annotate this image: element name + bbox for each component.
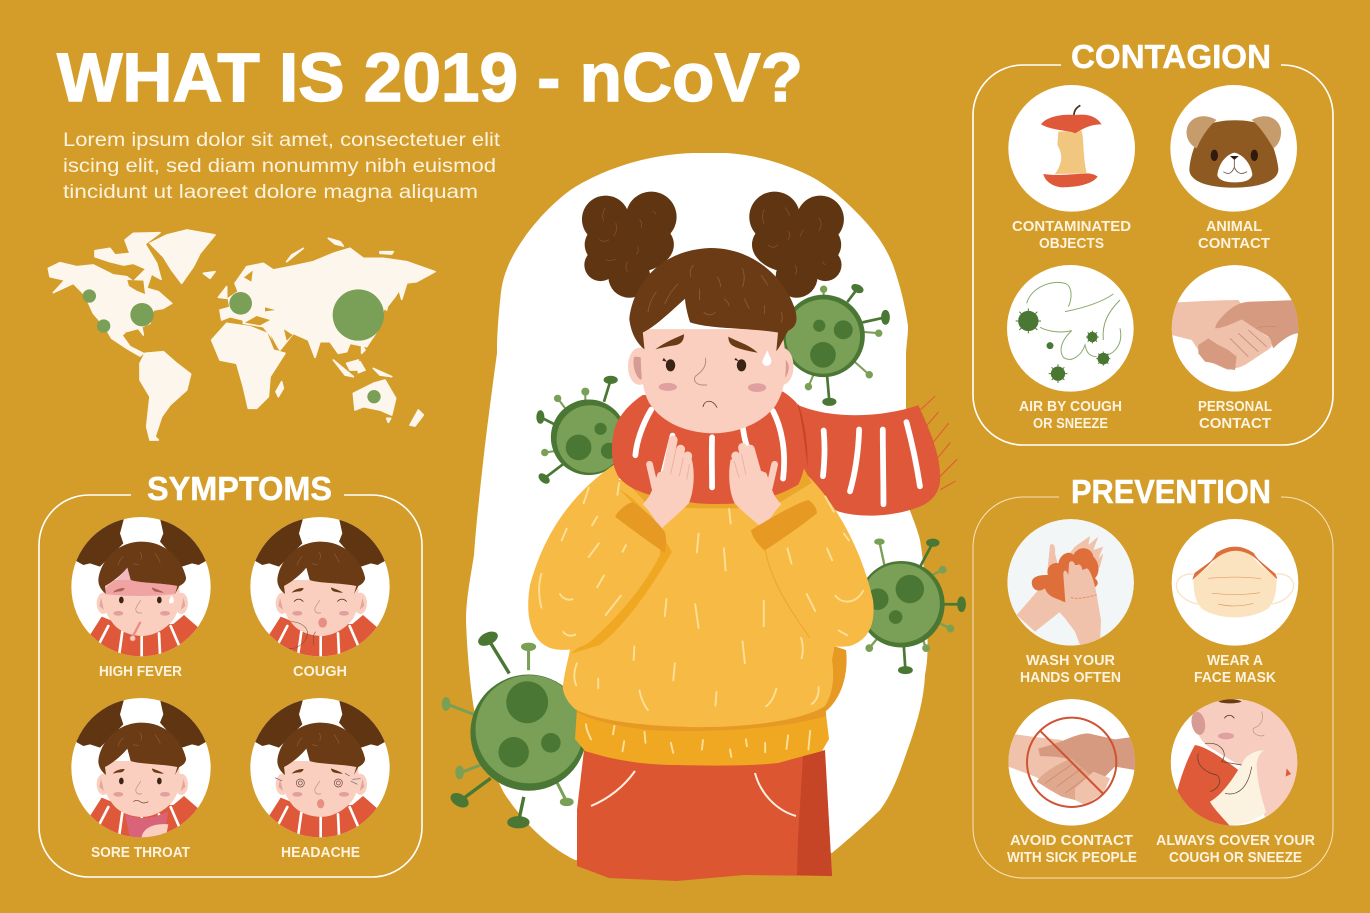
outbreak bubbles — [83, 289, 384, 403]
symptom: sore throat — [71, 698, 211, 861]
title: WHAT IS 2019 - nCoV? — [57, 39, 803, 116]
panel: prevention — [973, 473, 1333, 878]
intro text block: iscing elit, sed diam nonummy nibh euismod — [63, 156, 496, 177]
hair buns — [582, 192, 844, 298]
prevention heading: PREVENTION — [1071, 473, 1271, 510]
eyebrows — [655, 334, 758, 353]
symptoms heading backing — [131, 480, 344, 510]
label: HEADACHE — [281, 845, 360, 861]
symptoms heading: SYMPTOMS — [147, 470, 332, 507]
panel: symptoms — [39, 470, 422, 877]
virus: right lower — [858, 540, 965, 673]
intro text block: tincidunt ut laoreet dolore magna aliquam — [63, 182, 478, 203]
face — [628, 329, 794, 433]
icon: washing hands — [1007, 519, 1134, 646]
virus: large bottom left — [443, 631, 587, 827]
icon: handshake — [1172, 265, 1298, 392]
labels: contagion: OR SNEEZE — [1033, 416, 1108, 432]
virus: left middle — [538, 377, 627, 484]
labels: contagion — [1012, 219, 1272, 432]
icons: prevention — [1007, 519, 1302, 828]
world map — [48, 230, 435, 440]
panel: contagion — [973, 38, 1333, 445]
intro text block — [63, 130, 501, 203]
eyes — [662, 358, 746, 371]
white blob behind girl — [466, 153, 928, 860]
icon: cover cough — [1171, 699, 1302, 828]
cheeks — [659, 383, 766, 392]
contagion heading: CONTAGION — [1071, 38, 1271, 75]
nose — [695, 358, 707, 385]
contagion frame — [973, 65, 1333, 445]
labels: prevention: FACE MASK — [1194, 670, 1276, 686]
symptoms frame — [39, 495, 422, 877]
labels: contagion: OBJECTS — [1039, 236, 1104, 252]
icons: contagion — [1007, 85, 1298, 392]
scarf around neck — [612, 392, 812, 508]
labels: prevention: WASH YOUR — [1026, 653, 1115, 669]
intro text block: Lorem ipsum dolor sit amet, consectetuer elit — [63, 130, 501, 151]
prevention heading backing — [1059, 478, 1281, 508]
symptom: headache — [250, 698, 390, 861]
front hair — [629, 248, 797, 351]
scarf tail — [795, 396, 957, 516]
skirt — [577, 750, 832, 881]
labels: prevention — [1007, 653, 1315, 866]
labels: prevention: WEAR A — [1207, 653, 1263, 669]
sweat drop — [762, 350, 771, 366]
icon: face mask — [1172, 519, 1298, 646]
label: SORE THROAT — [91, 845, 190, 861]
labels: contagion: AIR BY COUGH — [1019, 399, 1122, 415]
label: COUGH — [293, 664, 347, 680]
label: HIGH FEVER — [99, 664, 182, 680]
girl illustration — [528, 192, 957, 881]
contagion heading backing — [1061, 45, 1281, 75]
labels: prevention: HANDS OFTEN — [1020, 670, 1121, 686]
labels: contagion: CONTACT — [1198, 236, 1270, 252]
labels: contagion: ANIMAL — [1206, 219, 1262, 235]
symptom: cough — [250, 517, 390, 680]
sweater — [528, 462, 874, 766]
labels: contagion: CONTAMINATED — [1012, 219, 1131, 235]
labels: prevention: COUGH OR SNEEZE — [1169, 850, 1302, 866]
prevention frame — [973, 497, 1333, 878]
icon: avoid contact — [1008, 699, 1135, 826]
mouth — [703, 401, 717, 408]
icon: air droplets — [1007, 265, 1134, 392]
labels: prevention: AVOID CONTACT — [1010, 833, 1133, 849]
icon: bear — [1170, 85, 1297, 212]
labels: contagion: PERSONAL — [1198, 399, 1272, 415]
symptom: high fever — [71, 517, 211, 680]
labels: prevention: WITH SICK PEOPLE — [1007, 850, 1137, 866]
hands and cuffs — [615, 440, 817, 553]
labels: contagion: CONTACT — [1199, 416, 1271, 432]
virus: top right — [782, 284, 889, 405]
labels: prevention: ALWAYS COVER YOUR — [1156, 833, 1315, 849]
icon: apple core — [1008, 85, 1135, 212]
